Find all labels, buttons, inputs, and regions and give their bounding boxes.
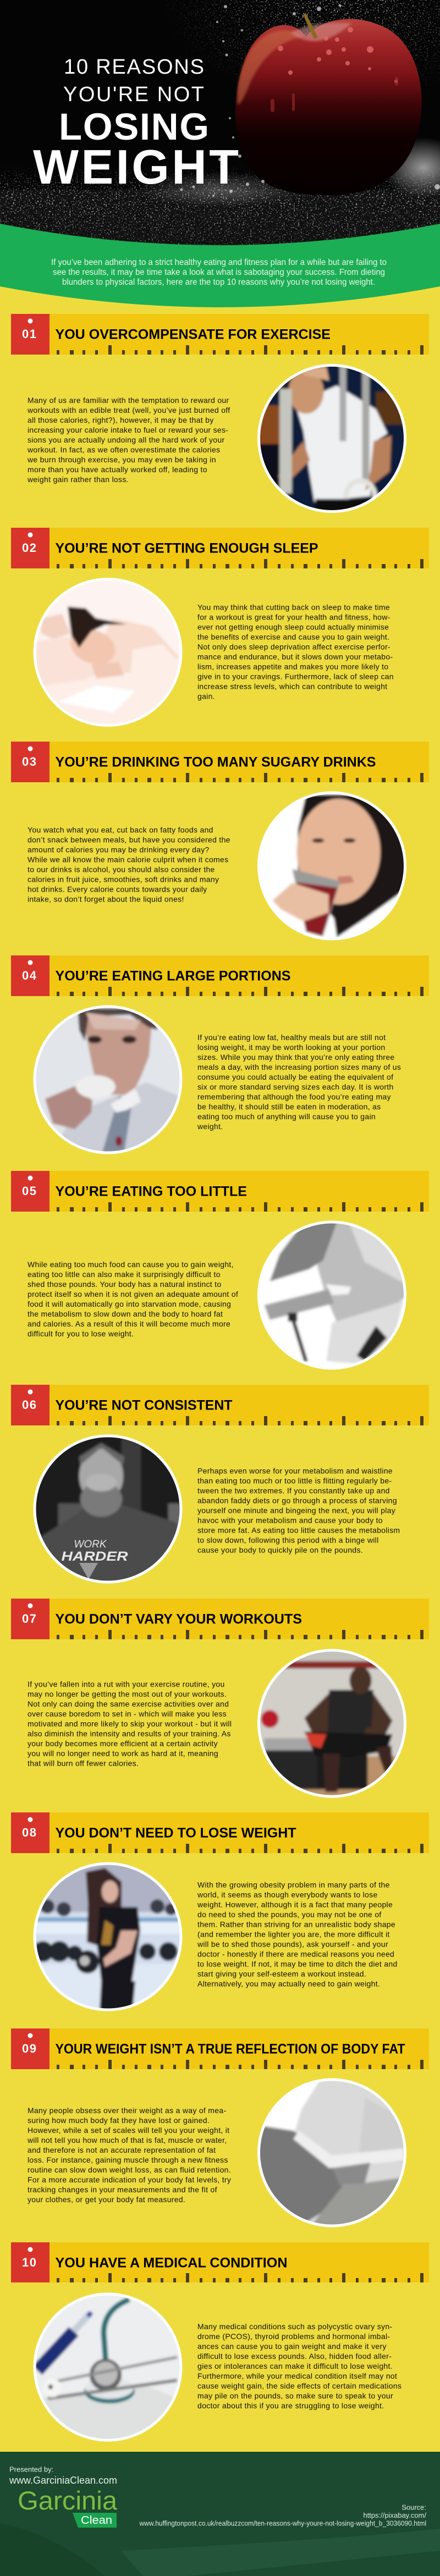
section 04 text: eating too much of anything will cause you to gain [197,1112,376,1121]
section 01 text: sions you are actually undoing all the hard work of your [28,435,224,444]
section 09 text: suring how much body fat they have lost or gained. [28,2116,210,2125]
section 08 text: will be to shed those pounds), ask yourself - and your [197,1939,388,1948]
intro text: If you’ve been adhering to a strict healthy eating and fitness plan for a while but are failing to [51,258,387,267]
section 02 text: for a workout is great for your health and fitness, how- [197,612,391,621]
title: WEIGHT [33,140,239,194]
footer: sources: https://pixabay.com/ [363,2511,426,2519]
section 02 text: You may think that cutting back on sleep to make time [197,602,390,611]
footer: sources: Source: [402,2503,426,2511]
section 03 text: amount of calories you may be drinking every day? [28,845,210,854]
section 08 text: weight. However, although it is a fact that many people [197,1900,393,1909]
section 01 text: all those calories, right?), however, it may be that by [28,416,214,424]
section 09 text: Many people obsess over their weight as a way of mea- [28,2106,226,2115]
section 02 text: give in to your cravings. Furthermore, lack of sleep can [197,672,394,681]
section 01 text: weight gain rather than loss. [27,475,129,484]
section 07 header: 07 [22,1612,36,1626]
hero: apple photo [0,0,440,269]
section 07 text: also diminish the intensity and results of your training. As [28,1729,231,1738]
section 03 header: YOU’RE DRINKING TOO MANY SUGARY DRINKS [55,754,376,770]
section 01 text: workouts with an edible treat (well, you’ve just burned off [27,406,230,414]
section 09 text: tracking changes in your measurements and the fit of [28,2185,217,2194]
section 05 text: the metabolism to slow down and the body to hoard fat [28,1309,223,1318]
footer background [0,2452,440,2576]
section 07 text: Not only can doing the same exercise activities over and [28,1700,229,1709]
section 04 header [11,955,429,996]
icon: apple [235,14,422,195]
section 07 text: may no longer be getting the most out of your workouts. [28,1690,227,1699]
section 10 header: 10 [22,2256,36,2269]
section 02 text: ever not getting enough sleep could actually minimise [197,622,389,631]
section 02 header [11,528,429,568]
footer: presented by: www.GarciniaClean.com [9,2475,117,2486]
photo: bearded man in gym: WORK [74,1539,107,1550]
section 08 text: With the growing obesity problem in many parts of the [197,1880,390,1889]
intro text: blunders to physical factors, here are the top 10 reasons why you’re not losing weight. [62,278,375,287]
section 06 header: YOU’RE NOT CONSISTENT [55,1397,232,1413]
section 09 text: your clothes, or get your body fat measured. [28,2195,185,2204]
section 10 text: doctor about this if you are struggling to lose weight. [197,2401,384,2410]
section 10 text: gies or intolerances can make it difficult to lose weight. [197,2362,393,2370]
section 04 text: consume you could actually be eating the equivalent of [197,1073,393,1081]
section 05 text: and calories. As a result of this it will become much more [28,1319,230,1328]
section 04 text: six or more standard serving sizes each day. It is worth [197,1082,394,1091]
section 01 header [11,314,429,355]
section 06 text: cause your body to quickly pile on the pounds. [197,1546,363,1555]
section 02 text: increase stress levels, which can contribute to weight [197,682,387,690]
photo: measuring tape around waist [257,2078,406,2227]
section 06 text: to slow down, following this period with a binge will [197,1536,379,1545]
photo: bearded man in gym: HARDER [62,1549,128,1564]
photo: woman drinking [257,792,406,940]
footer: presented by [9,2465,117,2486]
section 03 text: hot drinks. Every calorie counts towards your daily [28,885,207,894]
section 02 text: lism, increases appetite and makes you more likely to [197,662,388,671]
section 03 header [11,742,429,782]
section 05 header: 05 [22,1184,36,1198]
green intro band [0,224,440,307]
section 04 text: meals a day, with the increasing portion sizes many of us [197,1063,401,1071]
section 09 text: routine can slow down weight loss, as can fluid retention. [28,2165,231,2174]
section 04 text: weight. [197,1122,223,1131]
photo: man sitting on step in gym [257,1649,406,1798]
logo: Garcinia Clean: Clean [81,2514,112,2527]
section 04 text: sizes. While you may think that you’re only eating three [197,1053,394,1062]
section 01 header: 01 [22,327,36,341]
section 01 header: YOU OVERCOMPENSATE FOR EXERCISE [55,327,331,342]
section 08 text: do need to shed the pounds, you may not be one of [197,1910,382,1919]
section 04 text: losing weight, it may be worth looking at your portion [197,1043,385,1052]
section 08 header: 08 [22,1826,36,1839]
title: YOU'RE NOT [63,83,204,106]
photo: woman lifting dumbbell [32,1862,183,2011]
section 03 text: don’t snack between meals, but have you considered the [28,836,230,844]
section 02 text: Not only does sleep deprivation affect exercise perfor- [197,642,391,651]
section 05 text: difficult for you to lose weight. [28,1329,134,1338]
section 01 text: increasing your calorie intake to fuel or reward your ses- [28,425,228,434]
logo: Garcinia Clean: Garcinia [18,2486,118,2515]
section 09 text: will not tell you how much of that is fat, muscle or water, [27,2136,227,2144]
section 01 text: more than you have actually worked off, leading to [28,465,207,474]
section 02 header: YOU’RE NOT GETTING ENOUGH SLEEP [55,541,318,556]
intro text [51,258,387,287]
section 07 text: your body becomes more efficient at a certain activity [28,1739,218,1748]
section 06 text: than eating too much or too little is flitting regularly be- [197,1477,392,1485]
footer: sources [139,2503,426,2528]
section 05 header: YOU’RE EATING TOO LITTLE [55,1184,247,1199]
section 04 header: YOU’RE EATING LARGE PORTIONS [55,969,290,984]
photo: man at gym rings [257,364,406,513]
section 07 header [11,1599,429,1639]
section 06 text: Perhaps even worse for your metabolism and waistline [197,1467,393,1475]
section 09 text: and therefore is not an accurate representation of fat [28,2146,216,2154]
intro text: see the results, it may be time take a look at what is sabotaging your success. From dieting [53,268,385,277]
section 02 text: the benefits of exercise and cause you to gain weight. [197,632,389,641]
section 03 header: 03 [22,755,36,769]
section 08 text: (and remember the lighter you are, the more difficult it [197,1930,390,1938]
section 10 text: ances can cause you to gain weight and make it very [197,2342,387,2351]
section 03 text: intake, so don’t forget about the liquid ones! [28,895,184,904]
section 10 header: YOU HAVE A MEDICAL CONDITION [55,2255,287,2270]
section 10 text: may pile on the pounds, so make sure to speak to your [197,2391,393,2400]
section 07 text: over cause boredom to set in - which will make you less [28,1710,227,1718]
section 07 text: motivated and more likely to skip your workout - but it will [28,1720,232,1728]
section 06 header: 06 [22,1398,36,1412]
section 04 text: If you’re eating low fat, healthy meals but are still not [197,1033,386,1042]
section 05 text: food it will automatically go into starvation mode, causing [28,1300,231,1308]
section 08 header: YOU DON’T NEED TO LOSE WEIGHT [55,1825,296,1840]
section 02 header: 02 [22,541,36,555]
section 05 header [11,1171,429,1212]
title: 10 REASONS [64,56,204,79]
section 05 text: protect itself so when it is not given an adequate amount of [28,1290,238,1298]
section 10 text: difficult to lose excess pounds. Also, hidden food aller- [197,2352,392,2361]
section 09 header: 09 [22,2042,36,2055]
section 06 text: store more fat. As eating too little causes the metabolism [197,1526,400,1535]
section 05 text: eating too little can also make it surprisingly difficult to [28,1270,221,1279]
section 09 header [11,2028,429,2069]
section 05 text: While eating too much food can cause you to gain weight, [28,1260,234,1269]
photo: stethoscope [33,2292,183,2442]
section 01 text: workout. In fact, as we often overestimate the calories [27,445,220,454]
section 04 text: be healthy, it should still be eaten in moderation, as [197,1102,381,1111]
photo: woman sleeping [33,578,183,727]
section 06 text: yourself one minute and bingeing the next, you will play [197,1506,395,1515]
section 08 text: start giving your self-esteem a workout instead. [197,1969,366,1978]
section 04 header: 04 [22,969,37,982]
footer: presented by: Presented by: [9,2465,53,2474]
section 08 text: world, it seems as though everybody wants to lose [197,1890,378,1899]
section 03 text: calories in fruit juice, smoothies, soft drinks and many [28,875,219,884]
section 03 text: You watch what you eat, cut back on fatty foods and [28,826,213,834]
section 09 text: For a more accurate indication of your body fat levels, try [28,2175,231,2184]
photo: man eating doughnut [33,1005,183,1154]
section 06 text: havoc with your metabolism and cause your body to [197,1516,383,1525]
section 09 header: YOUR WEIGHT ISN’T A TRUE REFLECTION OF BODY FAT [55,2042,405,2057]
section 10 text: drome (PCOS), thyroid problems and hormonal imbal- [197,2332,390,2341]
section 01 text: we burn through exercise, you may even be taking in [27,455,216,464]
section 04 text: remembering that although the food you’re eating may [197,1092,391,1101]
section 08 header [11,1812,429,1853]
section 07 text: If you’ve fallen into a rut with your exercise routine, you [28,1680,225,1689]
photo: woman eating celery, black and white [257,1220,406,1370]
photo: bearded man in gym [33,1435,183,1583]
section 06 text: abandon faddy diets or go through a process of starving [197,1496,397,1505]
section 07 header: YOU DON’T VARY YOUR WORKOUTS [55,1612,302,1627]
section 08 text: doctor - honestly if there are medical reasons you need [197,1949,394,1958]
section 07 text: that will burn off fewer calories. [28,1759,139,1768]
section 09 text: However, while a set of scales will tell you your weight, it [28,2126,229,2135]
section 09 text: loss. For instance, gaining muscle through a new fitness [28,2155,228,2164]
section 08 text: them. Rather than striving for an unrealistic body shape [197,1920,395,1928]
title [33,56,239,194]
section 08 text: Alternatively, you may actually need to gain weight. [197,1979,380,1988]
title: LOSING [59,106,209,148]
section 06 header [11,1385,429,1425]
section 03 text: While we all know the main calorie culprit when it comes [28,855,228,864]
section 02 text: mance and endurance, but it slows down your metabo- [197,652,393,661]
section 08 text: to lose weight. If not, it may be time to ditch the diet and [197,1959,398,1968]
section 01 text: Many of us are familiar with the temptation to reward our [28,396,229,405]
logo: Garcinia Clean [18,2486,118,2528]
section 05 text: shed those pounds. Your body has a natural instinct to [28,1280,221,1289]
section 10 text: Furthermore, while your medical condition itself may not [197,2372,397,2380]
section 10 text: Many medical conditions such as polycystic ovary syn- [197,2322,392,2331]
section 03 text: to our drinks is alcohol, you should also consider the [28,865,215,874]
section 10 text: cause weight gain, the side effects of certain medications [197,2381,402,2390]
section 02 text: gain. [197,692,215,700]
section 06 text: tween the two extremes. If you constantly take up and [197,1486,390,1495]
section 10 header [11,2242,429,2282]
section 07 text: you will no longer need to work as hard at it, meaning [28,1749,218,1758]
